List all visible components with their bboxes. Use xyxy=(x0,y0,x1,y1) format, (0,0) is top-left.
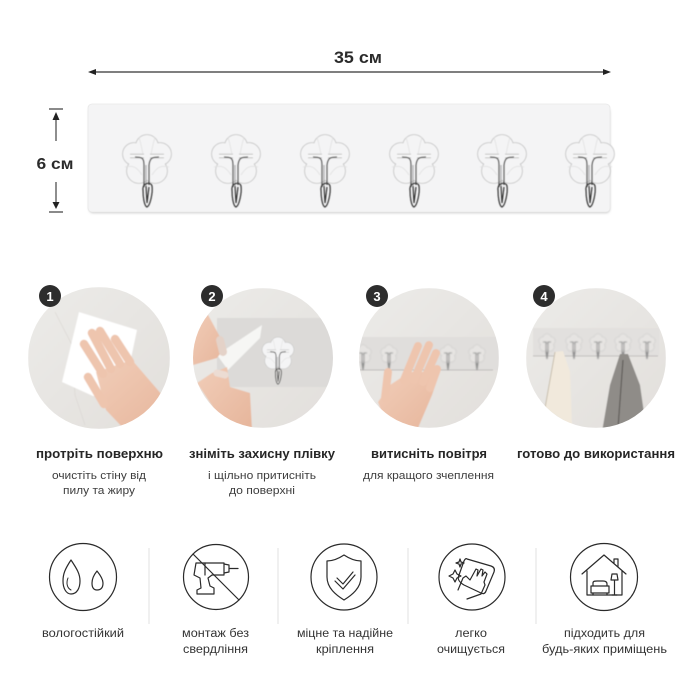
height label: 6 см xyxy=(36,156,74,173)
photo: hand wiping the wall xyxy=(28,287,175,430)
description 1: пилу та жиру xyxy=(63,485,136,497)
label xyxy=(182,628,249,656)
badge 4: 4 xyxy=(540,289,548,304)
label: вологостійкий xyxy=(42,628,124,640)
description 2: і щільно притисніть xyxy=(208,470,316,482)
width arrow xyxy=(92,71,606,73)
feature: easy to clean xyxy=(437,544,505,656)
height dimension: 6 cm xyxy=(36,109,74,212)
description 3: для кращого зчеплення xyxy=(363,470,494,482)
step 1 xyxy=(28,285,175,497)
step 4 xyxy=(517,285,675,461)
icon: house with sofa and lamp xyxy=(570,544,638,610)
feature: strong mount xyxy=(297,544,393,656)
badge 1 xyxy=(39,285,61,307)
label xyxy=(542,628,667,656)
heading 4: готово до використання xyxy=(517,446,675,461)
description 1 xyxy=(52,470,147,497)
label xyxy=(297,628,393,656)
icon: crossed-out drill xyxy=(184,544,248,610)
badge 2: 2 xyxy=(208,289,216,304)
icon: shield with check xyxy=(311,544,377,610)
badge 1: 1 xyxy=(46,289,54,304)
label: легко xyxy=(455,628,487,640)
photo: towels on the hooks xyxy=(526,288,666,432)
width dimension: 35 cm xyxy=(88,48,611,75)
product strip with six hooks xyxy=(88,104,614,213)
label: очищується xyxy=(437,644,505,656)
photo: peeling the protective film xyxy=(190,288,335,430)
label: свердління xyxy=(183,644,248,656)
width label: 35 см xyxy=(334,48,382,67)
label: монтаж без xyxy=(182,628,249,640)
description 2: до поверхні xyxy=(229,485,295,497)
label: підходить для xyxy=(564,628,645,640)
icon: hand with cloth and sparkles xyxy=(439,544,505,610)
heading 1: протріть поверхню xyxy=(36,446,163,461)
photo: pressing out the air xyxy=(355,288,499,432)
heading 2: зніміть захисну плівку xyxy=(189,446,336,461)
badge 2 xyxy=(201,285,223,307)
height arrows xyxy=(49,109,63,212)
icon: water drops xyxy=(50,544,116,610)
step 3 xyxy=(355,285,499,482)
badge 3: 3 xyxy=(373,289,381,304)
badge 4 xyxy=(533,285,555,307)
description 2 xyxy=(208,470,316,497)
feature: no drilling xyxy=(182,544,249,656)
label xyxy=(437,628,505,656)
label: кріплення xyxy=(316,644,374,656)
label: будь-яких приміщень xyxy=(542,644,667,656)
feature: suitable for any room xyxy=(542,544,667,656)
badge 3 xyxy=(366,285,388,307)
description 1: очистіть стіну від xyxy=(52,470,147,482)
heading 3: витисніть повітря xyxy=(371,446,487,461)
step 2 xyxy=(189,285,336,497)
feature: moisture resistant xyxy=(42,544,124,640)
label: міцне та надійне xyxy=(297,628,393,640)
